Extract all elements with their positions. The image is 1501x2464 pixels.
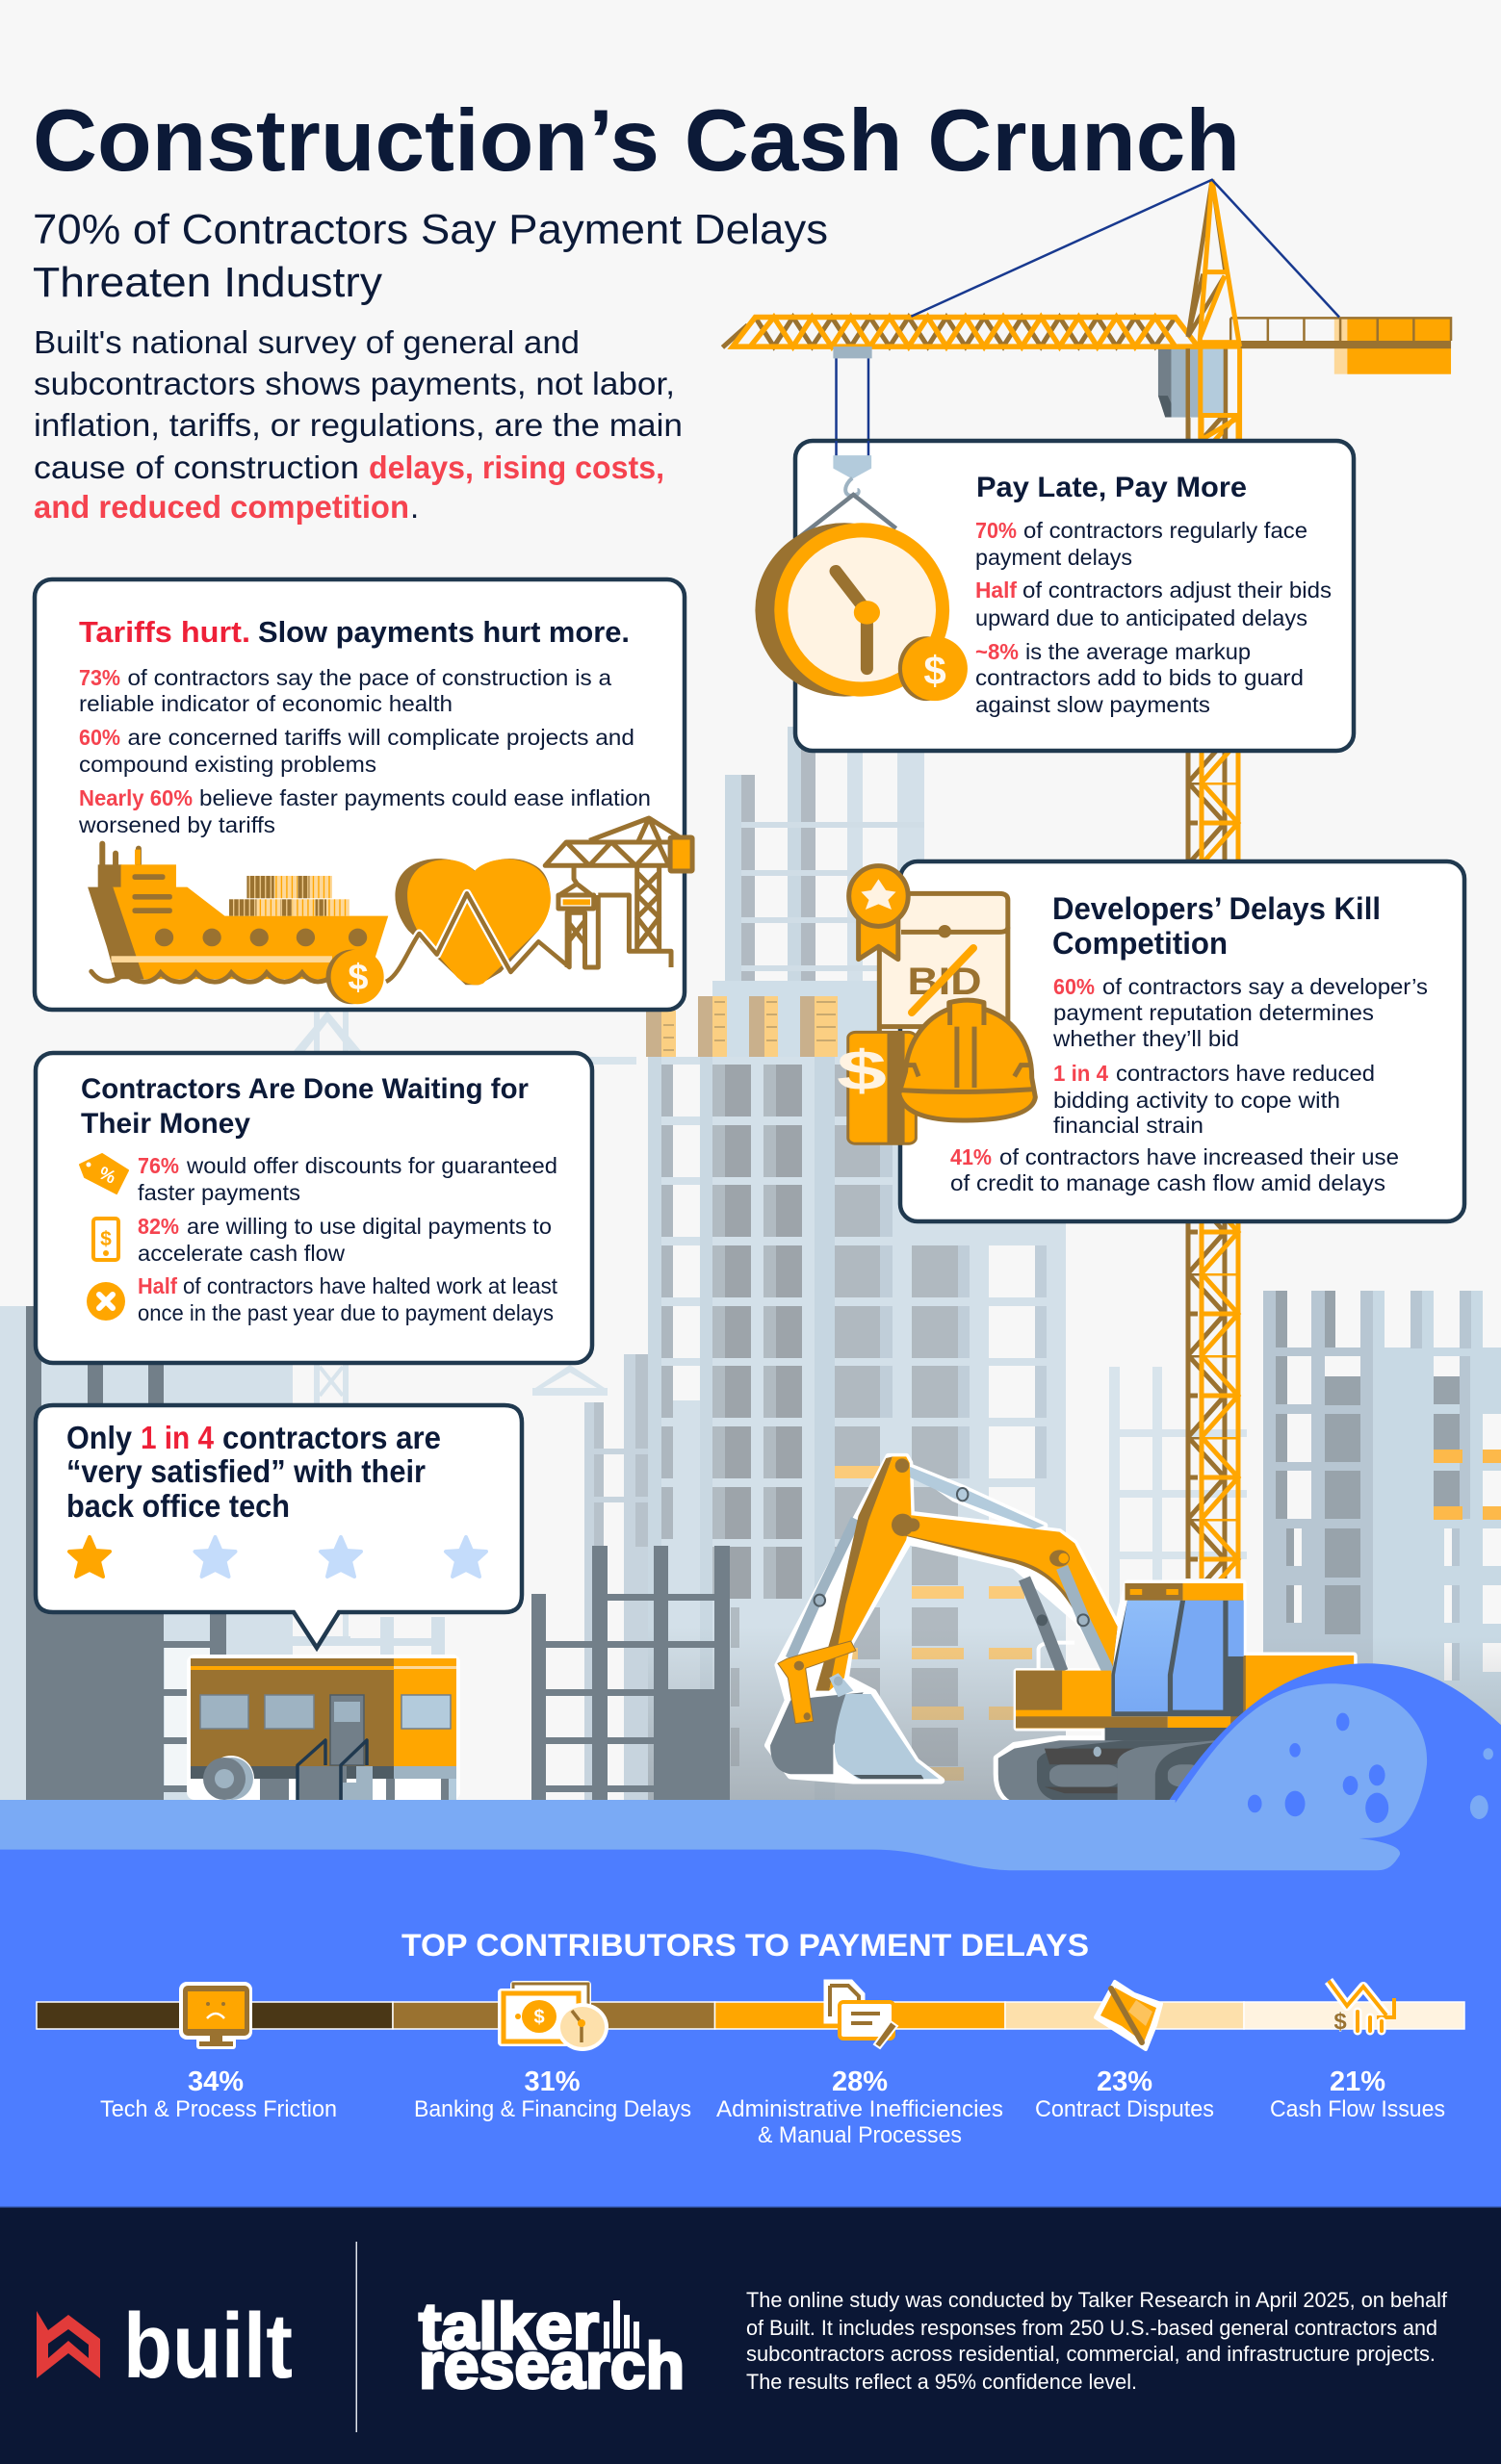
heading xyxy=(81,1073,529,1140)
heading: top contributors: TOP CONTRIBUTORS TO PAYMENT DELAYS xyxy=(401,1928,1089,1963)
stats text: are willing to use digital payments to xyxy=(187,1214,552,1239)
background: dark foreground scaffold xyxy=(531,1546,730,1800)
heading: contractors are xyxy=(222,1420,441,1455)
jib truss orange xyxy=(733,318,1198,346)
stat: tech friction: 34% xyxy=(188,2066,244,2097)
subtitle: Threaten Industry xyxy=(33,259,382,306)
stats text: 73% xyxy=(79,665,120,690)
methodology note: of Built. It includes responses from 250 U.S.-based general contractors and xyxy=(746,2316,1437,2340)
trailer xyxy=(187,1655,460,1802)
panel: Pay Late, Pay More xyxy=(755,441,1354,751)
stat: disputes: 23% xyxy=(1097,2066,1152,2097)
icon: ship, heart and crane xyxy=(88,818,692,1004)
stats text: compound existing problems xyxy=(79,752,376,777)
background: right tower xyxy=(1263,1291,1501,1800)
stat: cash flow xyxy=(1270,2066,1445,2122)
stats text: 60% xyxy=(1053,974,1095,999)
intro text: cause of construction xyxy=(34,449,359,485)
icon: document and pen xyxy=(826,1982,897,2048)
stats text: reliable indicator of economic health xyxy=(79,691,453,716)
icon: money and clock xyxy=(498,1981,608,2051)
ribbon medal xyxy=(848,866,916,1143)
stacked bar: contributors xyxy=(37,2002,1464,2029)
stats text: are concerned tariffs will complicate projects and xyxy=(127,725,634,750)
panel: Tariffs hurt xyxy=(35,579,692,1010)
heading: Only xyxy=(66,1420,133,1455)
stats text: worsened by tariffs xyxy=(78,812,275,837)
heading: Their Money xyxy=(81,1108,250,1140)
stats text xyxy=(975,518,1332,717)
icon: discount tag: % xyxy=(95,1163,118,1189)
logo: Built xyxy=(37,2295,293,2398)
stats text xyxy=(138,1153,557,1325)
stats text: 1 in 4 xyxy=(1053,1061,1108,1086)
bucket xyxy=(770,1692,864,1774)
icon: hook and hanging clock xyxy=(755,441,968,701)
background: pale mid tower right xyxy=(1109,1367,1247,1656)
bid document xyxy=(879,893,1008,1040)
stats text: upward due to anticipated delays xyxy=(975,605,1307,630)
tower top xyxy=(1188,180,1241,443)
subtitle xyxy=(33,206,828,306)
small crane xyxy=(545,818,680,967)
panel: Developers' Delays Kill Competition xyxy=(837,861,1464,1221)
coin xyxy=(326,950,377,1004)
stats text: believe faster payments could ease inflation xyxy=(199,785,651,810)
heading xyxy=(66,1420,441,1524)
heading: Contractors Are Done Waiting for xyxy=(81,1073,529,1105)
stat: cash flow: 21% xyxy=(1330,2066,1385,2097)
subtitle: 70% of Contractors Say Payment Delays xyxy=(33,206,828,253)
heading xyxy=(1052,891,1381,961)
icon: halted x xyxy=(87,1282,125,1321)
background: central tower xyxy=(648,1057,1066,1800)
icon: cash flow xyxy=(1329,1981,1394,2035)
blue section xyxy=(0,1915,1501,2207)
cab xyxy=(1111,1601,1243,1716)
stat: disputes xyxy=(1035,2066,1214,2122)
ECG line xyxy=(386,893,569,982)
undercarriage xyxy=(1105,1728,1246,1742)
intro text: inflation, tariffs, or regulations, are the main xyxy=(34,407,683,443)
logo: Talker Research xyxy=(419,2290,685,2402)
stats text: 60% xyxy=(79,725,120,750)
stat: cash flow: Cash Flow Issues xyxy=(1270,2096,1445,2122)
rating stars xyxy=(69,1537,486,1577)
background: pale tower crane xyxy=(181,1011,636,1800)
white outline xyxy=(767,1456,1354,1803)
stats text: accelerate cash flow xyxy=(138,1241,346,1266)
stats text: Half xyxy=(138,1273,177,1298)
stats text: of contractors regularly face xyxy=(1023,518,1307,543)
stats text: 70% xyxy=(975,518,1017,543)
boom xyxy=(903,1530,1118,1672)
stats text: Nearly 60% xyxy=(79,785,193,810)
heading: “very satisfied” with their xyxy=(66,1453,426,1489)
stats text: ~8% xyxy=(975,639,1019,664)
stat: banking: Banking & Financing Delays xyxy=(414,2096,691,2122)
background: central tower upper frame xyxy=(646,727,924,1058)
stats text: against slow payments xyxy=(975,692,1210,717)
stats text: financial strain xyxy=(1053,1113,1203,1138)
stats text: is the average markup xyxy=(1025,639,1251,664)
heading: Competition xyxy=(1052,926,1228,961)
cab railing xyxy=(1039,1643,1074,1670)
intro text: delays, rising costs, xyxy=(369,449,664,485)
tower crane mast xyxy=(1184,418,1242,1578)
icon: bid document, ribbon, wallet and hard hat: $ xyxy=(837,1040,887,1102)
icon: money and clock: $ xyxy=(533,2007,545,2028)
stats text: 82% xyxy=(138,1214,179,1239)
hard hat xyxy=(899,1000,1035,1120)
intro text: subcontractors shows payments, not labor, xyxy=(34,366,675,401)
stats text: bidding activity to cope with xyxy=(1053,1088,1340,1113)
methodology note xyxy=(746,2288,1448,2394)
heading: Slow payments hurt more. xyxy=(258,615,630,649)
background: mid-rise scaffold, pale xyxy=(584,1354,648,1800)
logo: Talker Research: research xyxy=(419,2329,685,2402)
intro text: and reduced competition xyxy=(34,489,409,525)
stats text: whether they’ll bid xyxy=(1052,1026,1239,1051)
icon: ship, heart and crane: $ xyxy=(348,958,369,998)
intro text: . xyxy=(410,489,419,525)
heading xyxy=(79,615,630,649)
methodology note: The results reflect a 95% confidence level. xyxy=(746,2370,1137,2394)
icon: bid document, ribbon, wallet and hard hat xyxy=(837,866,1035,1143)
stat: tech friction xyxy=(100,2066,337,2122)
stat: tech friction: Tech & Process Friction xyxy=(100,2096,337,2122)
cables xyxy=(911,180,1339,318)
methodology note: subcontractors across residential, commercial, and infrastructure projects. xyxy=(746,2342,1436,2366)
icon: bid document, ribbon, wallet and hard hat: BID xyxy=(907,961,982,1003)
panel: Contractors Are Done Waiting xyxy=(36,1053,592,1363)
stat: admin xyxy=(716,2066,1003,2148)
ship xyxy=(88,844,388,982)
intro text: Built's national survey of general and xyxy=(34,324,580,360)
heading: Tariffs hurt. xyxy=(79,615,250,649)
icon: cash flow: $ xyxy=(1333,2009,1347,2035)
contributor labels xyxy=(100,2066,1445,2148)
footer xyxy=(0,2206,1501,2464)
stats text: 76% xyxy=(138,1153,179,1178)
stats text xyxy=(78,665,651,837)
methodology note: The online study was conducted by Talker Research in April 2025, on behalf xyxy=(746,2288,1448,2312)
stat: admin: 28% xyxy=(832,2066,888,2097)
stats text: of contractors adjust their bids xyxy=(1022,578,1332,603)
intro text xyxy=(34,324,683,525)
background: left towers xyxy=(0,1306,445,1800)
logo: Built: built xyxy=(123,2295,293,2398)
heading: Pay Late, Pay More xyxy=(976,472,1247,503)
icon: handshake dispute xyxy=(1096,1982,1161,2049)
stats text: Half xyxy=(975,578,1017,603)
heading: back office tech xyxy=(66,1488,290,1524)
heart xyxy=(395,859,550,985)
heading: 1 in 4 xyxy=(141,1420,215,1455)
stats text xyxy=(950,974,1428,1195)
stats text: of contractors say a developer’s xyxy=(1102,974,1428,999)
stat: admin: Administrative Inefficiencies xyxy=(716,2096,1003,2122)
stats text: payment reputation determines xyxy=(1053,1000,1374,1025)
stat: banking: 31% xyxy=(524,2066,581,2097)
ground and mound xyxy=(0,1663,1501,1925)
cab xyxy=(1158,348,1225,418)
counter jib xyxy=(1230,318,1451,374)
stat: admin: & Manual Processes xyxy=(758,2122,962,2148)
panel: back office satisfaction callout xyxy=(36,1405,522,1648)
stats text: once in the past year due to payment delays xyxy=(138,1300,554,1325)
jib truss brown xyxy=(722,318,1176,347)
icon: phone payment: $ xyxy=(100,1228,112,1250)
stat: disputes: Contract Disputes xyxy=(1035,2096,1214,2122)
icon: phone payment xyxy=(93,1219,118,1260)
stat: banking xyxy=(414,2066,691,2122)
stats text: of contractors say the pace of construction is a xyxy=(127,665,612,690)
stats text: faster payments xyxy=(138,1180,300,1205)
heading: Developers’ Delays Kill xyxy=(1052,891,1381,926)
wallet xyxy=(848,1032,916,1143)
body rear xyxy=(1230,1656,1354,1728)
stats text: payment delays xyxy=(975,545,1132,570)
stats text: would offer discounts for guaranteed xyxy=(186,1153,557,1178)
stats text: of contractors have increased their use xyxy=(999,1144,1399,1169)
icon: monitor xyxy=(179,1982,252,2049)
body front xyxy=(1016,1671,1111,1729)
icon: hook and hanging clock: $ xyxy=(923,648,946,693)
stick xyxy=(815,1456,893,1691)
title: Construction’s Cash Crunch xyxy=(33,92,1240,190)
stats text: 41% xyxy=(950,1144,992,1169)
icon: discount tag xyxy=(80,1154,128,1194)
linkage xyxy=(778,1641,856,1724)
stats text: contractors have reduced xyxy=(1116,1061,1375,1086)
stats text: of credit to manage cash flow amid delays xyxy=(950,1170,1385,1195)
rear cylinder xyxy=(909,1466,1045,1528)
logo: Talker Research: talker xyxy=(419,2290,599,2363)
tower crane top xyxy=(722,180,1451,456)
track xyxy=(998,1740,1221,1803)
stats text: of contractors have halted work at least xyxy=(183,1273,557,1298)
stats text: contractors add to bids to guard xyxy=(975,665,1304,690)
excavator xyxy=(767,1456,1354,1803)
